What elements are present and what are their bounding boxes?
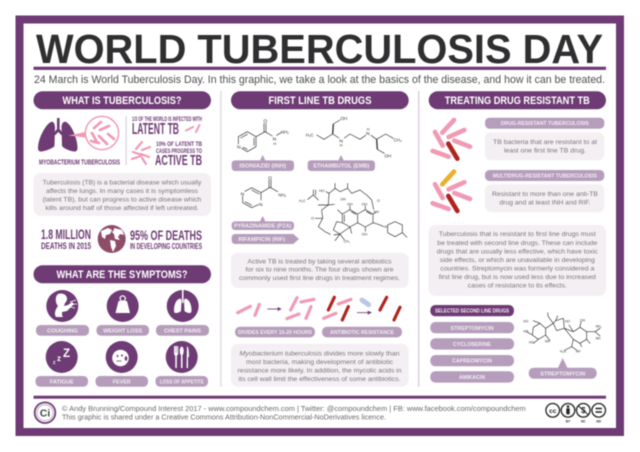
- text block: mycolic acids: most bacteria, making development of antibiotic: [246, 359, 394, 366]
- molecule: pyrazinamide: O: [268, 175, 272, 181]
- label: capreomycin: [430, 355, 514, 366]
- molecule: streptomycin: OH: [580, 319, 586, 323]
- label: ethambutol: [308, 155, 375, 171]
- stat: active TB: ACTIVE TB: [155, 153, 202, 169]
- stat: active TB: 10% OF LATENT TB: [156, 141, 202, 148]
- credits: This graphic is shared under a Creative Commons Attribution-NonCommercial-NoDerivatives licence.: [62, 415, 386, 422]
- stat: latent TB: 1/3 OF THE WORLD IS INFECTED WITH: [132, 117, 202, 123]
- text block: mycolic acids: Myobacterium tuberculosis divides more slowly than: [240, 350, 400, 358]
- credits: [62, 405, 526, 422]
- label: myobacterium tuberculosis: MYOBACTERIUM TUBERCULOSIS: [39, 158, 120, 166]
- molecule: isoniazid: N: [237, 145, 241, 151]
- icon: loss of appetite: [166, 341, 198, 373]
- label: drug-resistant tuberculosis: [485, 118, 604, 129]
- label: drug-resistant tuberculosis: DRUG-RESISTANT TUBERCULOSIS: [501, 121, 589, 127]
- logo: compound interest: [35, 402, 55, 423]
- icon: globe: [98, 225, 126, 253]
- heading: symptoms: WHAT ARE THE SYMPTOMS?: [56, 269, 188, 281]
- label: streptomycin: [529, 358, 597, 379]
- label: amikacin: AMIKACIN: [459, 375, 485, 381]
- diagram: antibiotic resistance: [324, 297, 400, 320]
- stat: deaths in 2015: DEATHS IN 2015: [41, 241, 91, 252]
- heading: symptoms: [34, 265, 211, 283]
- label: antibiotic resistance: ANTIBIOTIC RESISTANCE: [330, 330, 394, 336]
- text block: second line drugs: be treated with second line drugs. These can include: [437, 240, 598, 247]
- panel: symptoms: [34, 265, 211, 387]
- text block: second line drugs: side effects, or which are unavailable in developing: [440, 257, 595, 264]
- text block: second line drugs: Tuberculosis that is resistant to first line drugs must: [439, 231, 596, 238]
- label: divides every 15-20 hours: [235, 327, 315, 337]
- text block: mycolic acids: its cell wall limit the effectiveness of some antibiotics.: [238, 376, 401, 383]
- molecule: isoniazid: O: [263, 118, 267, 124]
- text block: second line drugs: first line drug, but is now used less due to increased: [439, 274, 596, 281]
- text block: mycolic acids: resistance more likely. In addition, the mycolic acids in: [238, 368, 402, 374]
- label: streptomycin list item: STREPTOMYCIN: [450, 326, 494, 332]
- molecule: rifampicin: N: [384, 225, 387, 229]
- text block: second line drugs: countries. Streptomycin was formerly considered a: [440, 265, 595, 272]
- text block: TB description: kills around half of those affected if left untreated.: [45, 205, 199, 212]
- molecule: ethambutol: H: [367, 127, 370, 132]
- molecule: ethambutol: H₃C: [306, 133, 314, 138]
- stat: deaths in 2015: 1.8 MILLION: [41, 227, 91, 242]
- icon: creative commons licence: [546, 404, 606, 424]
- label: selected second line drugs: SELECTED SECOND LINE DRUGS: [435, 309, 509, 315]
- text block: TB description: Tuberculosis (TB) is a bacterial disease which usually: [43, 179, 202, 186]
- stat: latent TB: LATENT TB: [132, 121, 179, 138]
- label: coughing: [36, 325, 89, 336]
- molecule: rifampicin: O: [377, 199, 380, 203]
- label: loss of appetite: [156, 376, 208, 387]
- label: weight loss: WEIGHT LOSS: [103, 328, 142, 334]
- label: chest pains: [156, 325, 209, 336]
- stat: deaths in developing countries: [130, 228, 202, 251]
- molecule: streptomycin: NH: [596, 336, 601, 340]
- text block: active TB treatment: for six to nine months. The four drugs shown are: [246, 267, 394, 274]
- molecule: rifampicin: OH: [340, 198, 346, 202]
- label: isoniazid: ISONIAZID (INH): [239, 163, 286, 169]
- stat: active TB: CASES PROGRESS TO: [156, 148, 202, 155]
- label: chest pains: CHEST PAINS: [164, 328, 201, 334]
- text block: active TB treatment: commonly used first line drugs in treatment regimes.: [239, 275, 400, 282]
- label: loss of appetite: LOSS OF APPETITE: [160, 379, 204, 385]
- icon: creative commons licence: ND: [596, 420, 602, 424]
- molecule: isoniazid: NH₂: [281, 129, 289, 134]
- credits: © Andy Brunning/Compound Interest 2017 - www.compoundchem.com | Twitter: @compoundchem | FB: www.facebook.com/compoundchem: [62, 405, 526, 413]
- label: fever: [96, 376, 148, 387]
- text block: multidrug-resistant definition: drug and at least INH and RIF.: [500, 200, 591, 206]
- label: cycloserine: [430, 338, 514, 350]
- icon: drug-resistant bacteria: [433, 120, 470, 159]
- molecule: pyrazinamide: [241, 175, 287, 208]
- molecule: rifampicin: O: [311, 217, 314, 221]
- molecule: rifampicin: CH₃: [344, 240, 350, 244]
- label: fever: FEVER: [113, 380, 131, 386]
- heading: first line TB drugs: [231, 91, 409, 109]
- heading: what is tuberculosis: [34, 91, 211, 109]
- text block: second line drugs: drugs that are usually less effective, which have toxic: [437, 248, 599, 255]
- label: multidrug-resistant tuberculosis: [485, 170, 604, 181]
- molecule: streptomycin: HO: [523, 329, 529, 333]
- label: rifampicin: RIFAMPICIN (RIF): [238, 237, 285, 243]
- molecule: ethambutol: OH: [340, 116, 347, 121]
- label: multidrug-resistant tuberculosis: MULTIDRUG-RESISTANT TUBERCULOSIS: [493, 174, 597, 180]
- molecule: rifampicin: [299, 183, 407, 244]
- text block: drug-resistant definition: TB bacteria that are resistant to at: [493, 139, 597, 146]
- label: amikacin: [430, 371, 514, 383]
- diagram: bacterial division: [238, 298, 314, 319]
- molecule: streptomycin: NH: [576, 349, 581, 353]
- icon: coughing: [46, 290, 78, 322]
- molecule: streptomycin: [523, 313, 602, 353]
- molecule: rifampicin: OH: [362, 232, 367, 236]
- text block: second line drugs: [429, 225, 606, 296]
- molecule: pyrazinamide: NH₂: [278, 193, 287, 198]
- molecule: rifampicin: HO: [319, 189, 325, 193]
- text block: mycolic acids: [231, 344, 409, 387]
- molecule: pyrazinamide: N: [259, 202, 263, 208]
- molecule: streptomycin: NH: [545, 340, 550, 344]
- label: fatigue: FATIGUE: [50, 380, 74, 386]
- text block: second line drugs: cases of resistance to its effects.: [468, 282, 567, 290]
- label: divides every 15-20 hours: DIVIDES EVERY 15-20 HOURS: [238, 330, 312, 336]
- molecule: ethambutol: CH₃: [394, 138, 402, 143]
- stat: deaths in developing countries: IN DEVELOPING COUNTRIES: [130, 241, 202, 251]
- logo: compound interest: Ci: [40, 408, 50, 420]
- molecule: ethambutol: N: [339, 138, 343, 144]
- molecule: isoniazid: [237, 118, 289, 152]
- stat: active TB: [132, 141, 202, 169]
- stat: deaths in developing countries: 95% OF DEATHS: [130, 228, 202, 243]
- panel: first line TB drugs: [231, 91, 409, 387]
- label: cycloserine: CYCLOSERINE: [453, 342, 491, 348]
- panel: what is tuberculosis: [34, 91, 211, 253]
- molecule: streptomycin: HO: [523, 319, 529, 323]
- label: rifampicin: [232, 234, 299, 244]
- text block: drug-resistant definition: least one first line TB drug.: [504, 148, 586, 154]
- icon: creative commons licence: BY: [566, 420, 571, 424]
- icon: creative commons licence: cc: [549, 408, 557, 415]
- icon: chest pains: [167, 290, 199, 322]
- footer: [34, 396, 606, 424]
- chemical structures: [232, 116, 407, 244]
- molecule: ethambutol: OH: [384, 153, 391, 158]
- panel: treating drug resistant TB: [429, 91, 606, 383]
- label: ethambutol: ETHAMBUTOL (EMB): [313, 163, 369, 169]
- heading: what is tuberculosis: WHAT IS TUBERCULOSIS?: [62, 95, 182, 107]
- label: streptomycin: STREPTOMYCIN: [540, 372, 585, 378]
- molecule: rifampicin: OH: [347, 202, 353, 206]
- title: WORLD TUBERCULOSIS DAY: [36, 26, 603, 72]
- molecule: ethambutol: N: [366, 131, 370, 137]
- heading: treating drug resistant TB: TREATING DRUG RESISTANT TB: [445, 95, 590, 107]
- stat: latent TB: [132, 117, 202, 138]
- label: capreomycin: CAPREOMYCIN: [452, 359, 492, 365]
- label: antibiotic resistance: [322, 327, 402, 337]
- label: pyrazinamide: PYRAZINAMIDE (PZA): [234, 224, 291, 230]
- molecule: streptomycin: HO: [565, 320, 570, 324]
- molecule: streptomycin: NH₂: [596, 325, 602, 329]
- icon: lungs: [38, 118, 78, 152]
- icon: creative commons licence: NC: [581, 420, 586, 424]
- subtitle: 24 March is World Tuberculosis Day. In this graphic, we take a look at the basics of the disease, and how it can be treated.: [34, 74, 605, 86]
- heading: first line TB drugs: FIRST LINE TB DRUGS: [268, 95, 372, 107]
- icon: fatigue: z: [53, 360, 56, 366]
- molecule: isoniazid: H: [273, 141, 276, 146]
- molecule: streptomycin: H₂N: [560, 349, 567, 353]
- icon: fatigue: [46, 341, 78, 373]
- icon: creative commons licence: $: [581, 406, 586, 415]
- icon: weight loss: [107, 290, 139, 322]
- text block: drug-resistant definition: [485, 132, 604, 160]
- text block: multidrug-resistant definition: Resistant to more than one anti-TB: [492, 191, 599, 198]
- heading: treating drug resistant TB: [429, 91, 606, 109]
- label: fatigue: [36, 376, 88, 387]
- icon: multidrug-resistant bacteria: [433, 172, 470, 211]
- label: selected second line drugs: [430, 305, 514, 316]
- text block: TB description: affects the lungs. In many cases it is symptomless: [46, 188, 199, 195]
- label: pyrazinamide: [232, 216, 294, 230]
- icon: fatigue: Z: [63, 348, 70, 360]
- icon: magnified bacteria: [68, 116, 119, 150]
- label: coughing: COUGHING: [47, 328, 78, 334]
- icon: fatigue: z: [57, 354, 61, 363]
- stat: deaths in 2015: [41, 227, 91, 252]
- molecule: ethambutol: [306, 116, 402, 158]
- text block: active TB treatment: [231, 253, 409, 288]
- text block: multidrug-resistant definition: [485, 184, 604, 212]
- label: isoniazid: [232, 155, 294, 171]
- molecule: streptomycin: HO: [529, 340, 534, 344]
- molecule: rifampicin: OH: [362, 202, 367, 206]
- text block: active TB treatment: Active TB is treated by taking several antibiotics: [248, 258, 392, 265]
- text block: TB description: (latent TB), but can progress to active disease which: [43, 196, 202, 203]
- molecule: ethambutol: H: [340, 143, 343, 148]
- label: streptomycin list item: [430, 322, 514, 333]
- label: weight loss: [96, 325, 149, 336]
- text block: TB description: [34, 173, 211, 216]
- molecule: isoniazid: N: [273, 137, 277, 143]
- molecule: rifampicin: H₃C: [299, 199, 306, 203]
- molecule: pyrazinamide: N: [241, 191, 245, 197]
- icon: fever: [106, 341, 138, 373]
- molecule: rifampicin: NH: [374, 210, 379, 214]
